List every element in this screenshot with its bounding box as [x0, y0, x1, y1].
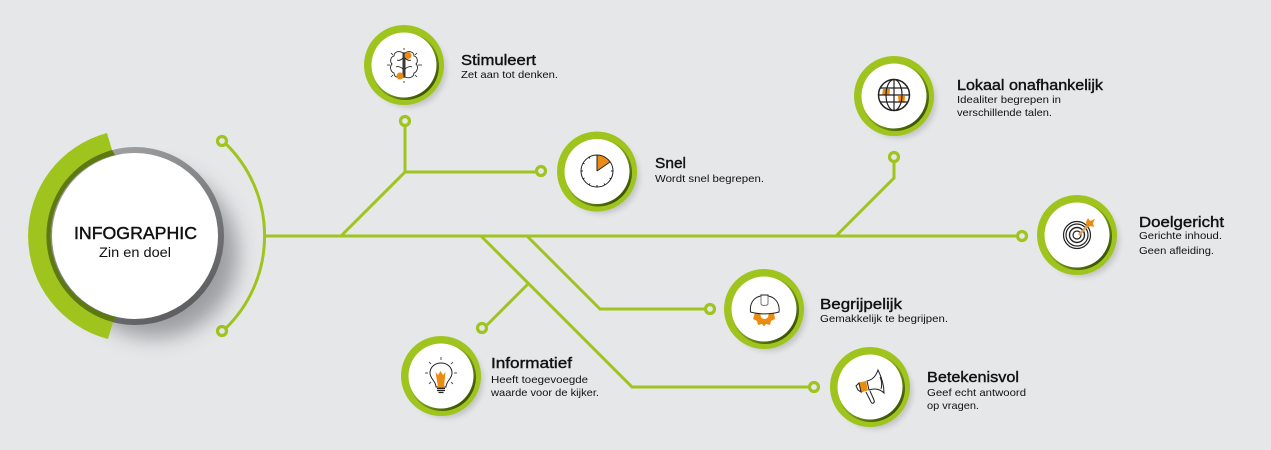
description: Geef echt antwoord [927, 387, 1026, 399]
green arc [28, 133, 113, 339]
white disc [52, 153, 218, 319]
icon: brain [387, 48, 422, 83]
main heading: INFOGRAPHIC [74, 223, 197, 243]
icon: globe [878, 80, 910, 110]
item: Informatief [401, 336, 599, 418]
grey ring [46, 147, 224, 325]
main circle: Infographic [28, 133, 238, 339]
item: Lokaal onafhankelijk [854, 56, 1104, 138]
description: Idealiter begrepen in [957, 94, 1061, 106]
item: Stimuleert [364, 25, 558, 107]
description: Heeft toegevoegde [491, 374, 588, 386]
item: Snel [557, 132, 764, 214]
icon: target [1064, 218, 1095, 248]
description: Gerichte inhoud. [1139, 230, 1222, 242]
title: Lokaal onafhankelijk [957, 77, 1104, 94]
item: Doelgericht [1037, 195, 1225, 277]
icon: clock [581, 155, 613, 187]
connector network [218, 116, 1026, 392]
dark green inner arc [46, 150, 116, 322]
description line 2: verschillende talen. [957, 107, 1052, 119]
title: Betekenisvol [927, 369, 1019, 386]
description line 2: waarde voor de kijker. [490, 387, 599, 399]
drop shadow [70, 170, 238, 338]
main subheading: Zin en doel [99, 244, 171, 260]
description: Wordt snel begrepen. [655, 173, 764, 185]
title: Doelgericht [1139, 214, 1225, 231]
title: Snel [655, 155, 686, 172]
title: Begrijpelijk [820, 296, 903, 313]
description line 2: op vragen. [927, 400, 979, 412]
icon: megaphone [856, 370, 884, 403]
description: Gemakkelijk te begrijpen. [820, 313, 948, 325]
title: Informatief [491, 355, 573, 372]
item: Betekenisvol [830, 347, 1026, 429]
icon: light bulb [425, 357, 457, 392]
item: Begrijpelijk [724, 269, 948, 351]
description line 2: Geen afleiding. [1139, 245, 1214, 257]
title: Stimuleert [461, 52, 537, 69]
description: Zet aan tot denken. [461, 69, 558, 81]
icon: helmet and gear [750, 295, 779, 326]
